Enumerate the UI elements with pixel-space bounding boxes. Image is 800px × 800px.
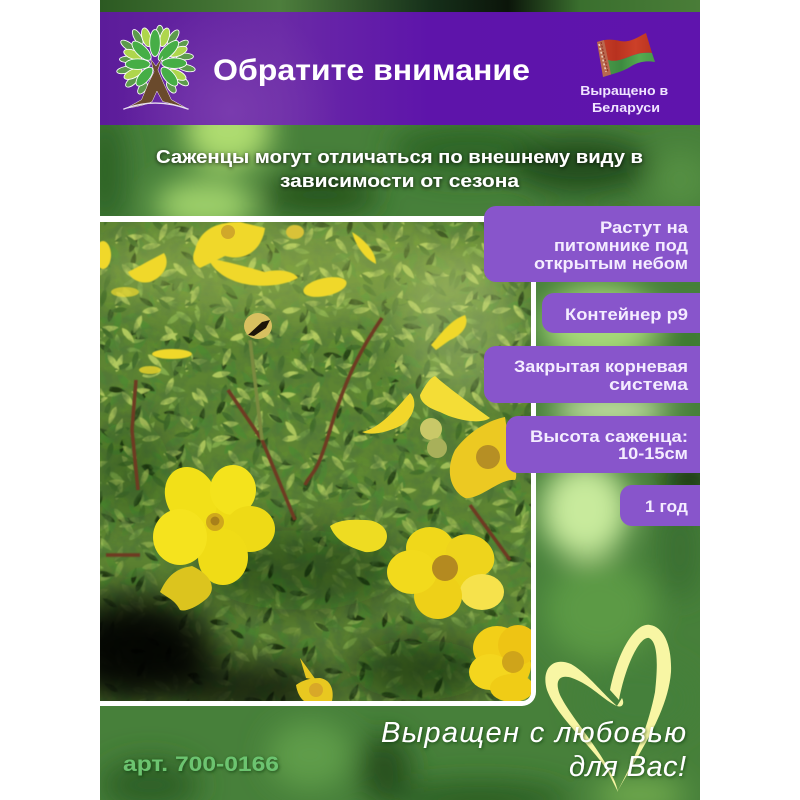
light and shade over foliage: [100, 222, 531, 701]
photo panel: yellow potentilla shrub: [55, 216, 538, 720]
text: grown with love slogan: [381, 717, 686, 783]
dark beetle bud: [244, 313, 272, 339]
text: article number: арт. 700-0166: [123, 752, 279, 776]
icon: yellow heart: [545, 625, 671, 792]
label: grown outdoors: [484, 206, 700, 282]
subheading text: зависимости от сезона: [280, 171, 520, 191]
large right flower: [387, 526, 504, 619]
subheading text: Саженцы могут отличаться по внешнему виду в: [156, 147, 643, 167]
label: seedling height: 10-15см: [618, 445, 688, 463]
subheading text: [156, 147, 643, 191]
label: grown outdoors: открытым небом: [534, 255, 688, 273]
label: container: Контейнер р9: [565, 306, 688, 324]
text: grown in Belarus: Выращено в: [580, 83, 668, 98]
label: closed root system: [484, 346, 700, 403]
centre flower with buds: [362, 376, 516, 498]
label: age: [620, 485, 700, 526]
text: grown with love slogan: Выращен с любовью: [381, 717, 686, 749]
label: container: [542, 293, 700, 333]
big flower: [153, 458, 275, 585]
panel: feature labels: [484, 206, 700, 526]
icon: tree logo: [116, 25, 196, 109]
label: grown outdoors: питомнике под: [554, 237, 689, 255]
label: seedling height: [506, 416, 700, 473]
title: Обратите внимание: [213, 54, 530, 87]
yellow flower behind: [160, 566, 212, 611]
text: grown with love slogan: для Вас!: [569, 751, 686, 783]
label: age: 1 год: [645, 498, 689, 516]
panel: purple header banner: [100, 12, 700, 125]
text: grown in Belarus: Беларуси: [592, 100, 660, 115]
icon: Belarus flag: [597, 33, 655, 77]
stems: [106, 318, 510, 560]
bottom bud flower: [296, 678, 333, 701]
label: closed root system: Закрытая корневая: [514, 358, 688, 376]
label: seedling height: Высота саженца:: [530, 428, 688, 446]
label: grown outdoors: Растут на: [600, 219, 689, 237]
small flower: [330, 520, 387, 552]
label: closed root system: система: [609, 376, 689, 394]
corner flower: [469, 625, 531, 701]
upper flowers: [95, 222, 467, 374]
background: blurred green bokeh: [83, 0, 714, 800]
